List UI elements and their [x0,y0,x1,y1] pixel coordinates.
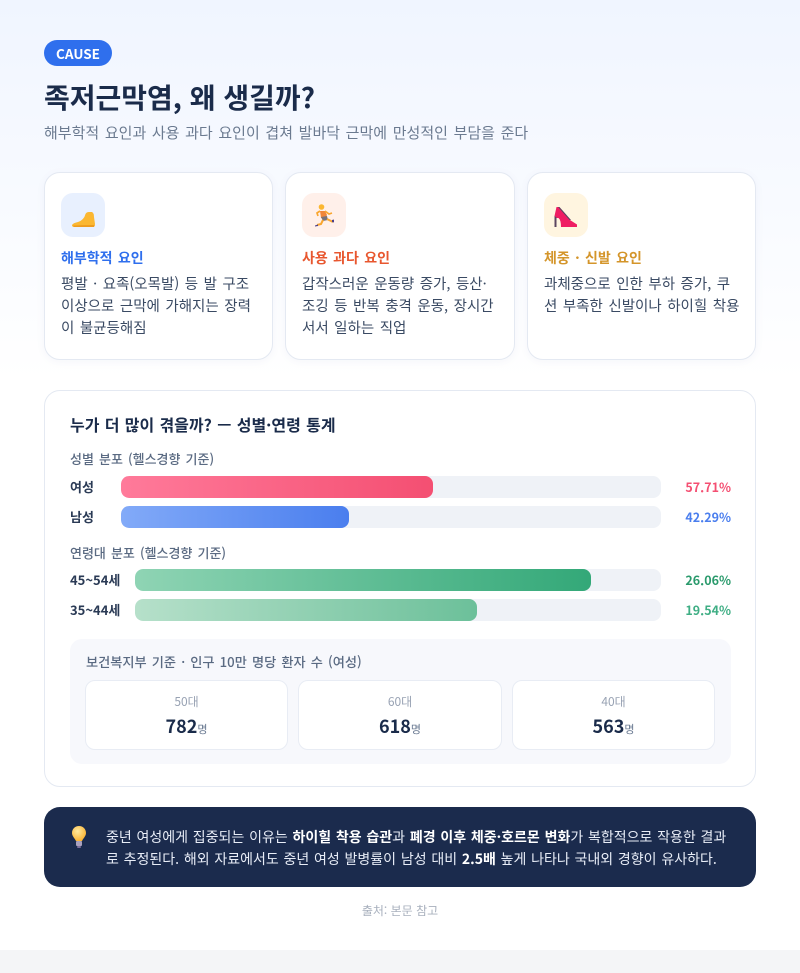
bar: female: 여성 [70,477,94,496]
bar: age 35-44: 19.54% [685,600,731,619]
panel: gender and age statistics [44,390,756,787]
card text: weight and footwear factor: 션 부족한 신발이나 하이힐 착용 [544,295,739,316]
stat: 60s: 60대 [388,693,412,710]
bar: age 45-54: 45~54세 [70,570,120,589]
card heading: weight and footwear factor: 체중 · 신발 요인 [544,248,642,268]
card heading: anatomical factor: 해부학적 요인 [61,248,144,268]
icon: foot [61,193,105,237]
card text: overuse factor: 갑작스러운 운동량 증가, 등산· [302,273,487,294]
stat: 50s: 782명 [166,713,208,739]
section label: age: 연령대 분포 (헬스경향 기준) [70,543,226,562]
bar: female [70,476,731,498]
stat: 50s: 50대 [174,693,199,710]
source note: 출처: 본문 참고 [362,902,438,919]
panel: anatomical factor card [44,172,273,360]
stat: 40s: 563명 [592,713,634,739]
icon: light bulb [72,826,86,848]
bar: age 45-54: 26.06% [685,570,731,589]
card text: overuse factor [302,273,494,338]
bar: male [70,506,731,528]
card text: anatomical factor: 평발 · 요족(오목발) 등 발 구조 [61,273,249,294]
bar: male: 남성 [70,507,94,526]
panel: patients per 100k [70,639,731,764]
card text: weight and footwear factor: 과체중으로 인한 부하 증가, 쿠 [544,273,730,294]
title: 족저근막염, 왜 생길까? [44,77,315,117]
statistics heading: 누가 더 많이 겪을까? — 성별·연령 통계 [70,412,336,436]
badge: CAUSE [44,40,112,66]
callout [44,807,756,887]
card text: overuse factor: 조깅 등 반복 충격 운동, 장시간 [302,295,494,316]
stat: 40s: 40대 [601,693,626,710]
callout text: 중년 여성에게 집중되는 이유는 하이힐 착용 습관과 폐경 이후 체중·호르몬 변화가 복합적으로 작용한 결과 [106,827,726,847]
icon: high heel [544,193,588,237]
card text: anatomical factor: 이 불균등해짐 [61,317,147,338]
stat: 40s [512,680,715,750]
stat: 50s [85,680,288,750]
bar: age 35-44 [70,599,731,621]
panel: weight and footwear factor card [527,172,756,360]
card text: weight and footwear factor [544,273,739,316]
bar: female: 57.71% [685,477,731,496]
card text: anatomical factor [61,273,251,338]
callout text: 로 추정된다. 해외 자료에서도 중년 여성 발병률이 남성 대비 2.5배 높게 나타나 국내외 경향이 유사하다. [106,849,717,869]
stat: 60s: 618명 [379,713,421,739]
card text: overuse factor: 서서 일하는 직업 [302,317,406,338]
patients heading: 보건복지부 기준 · 인구 10만 명당 환자 수 (여성) [86,652,362,671]
bar: age 35-44: 35~44세 [70,600,120,619]
card heading: overuse factor: 사용 과다 요인 [302,248,390,268]
subtitle: 해부학적 요인과 사용 과다 요인이 겹쳐 발바닥 근막에 만성적인 부담을 준다 [44,122,528,143]
section label: gender: 성별 분포 (헬스경향 기준) [70,449,214,468]
bar: age 45-54 [70,569,731,591]
stat: 60s [298,680,502,750]
badge: CAUSE: CAUSE [56,43,100,63]
callout text [106,827,726,869]
icon: runner [302,193,346,237]
bar: male: 42.29% [685,507,731,526]
panel: overuse factor card [285,172,515,360]
card text: anatomical factor: 이상으로 근막에 가해지는 장력 [61,295,251,316]
